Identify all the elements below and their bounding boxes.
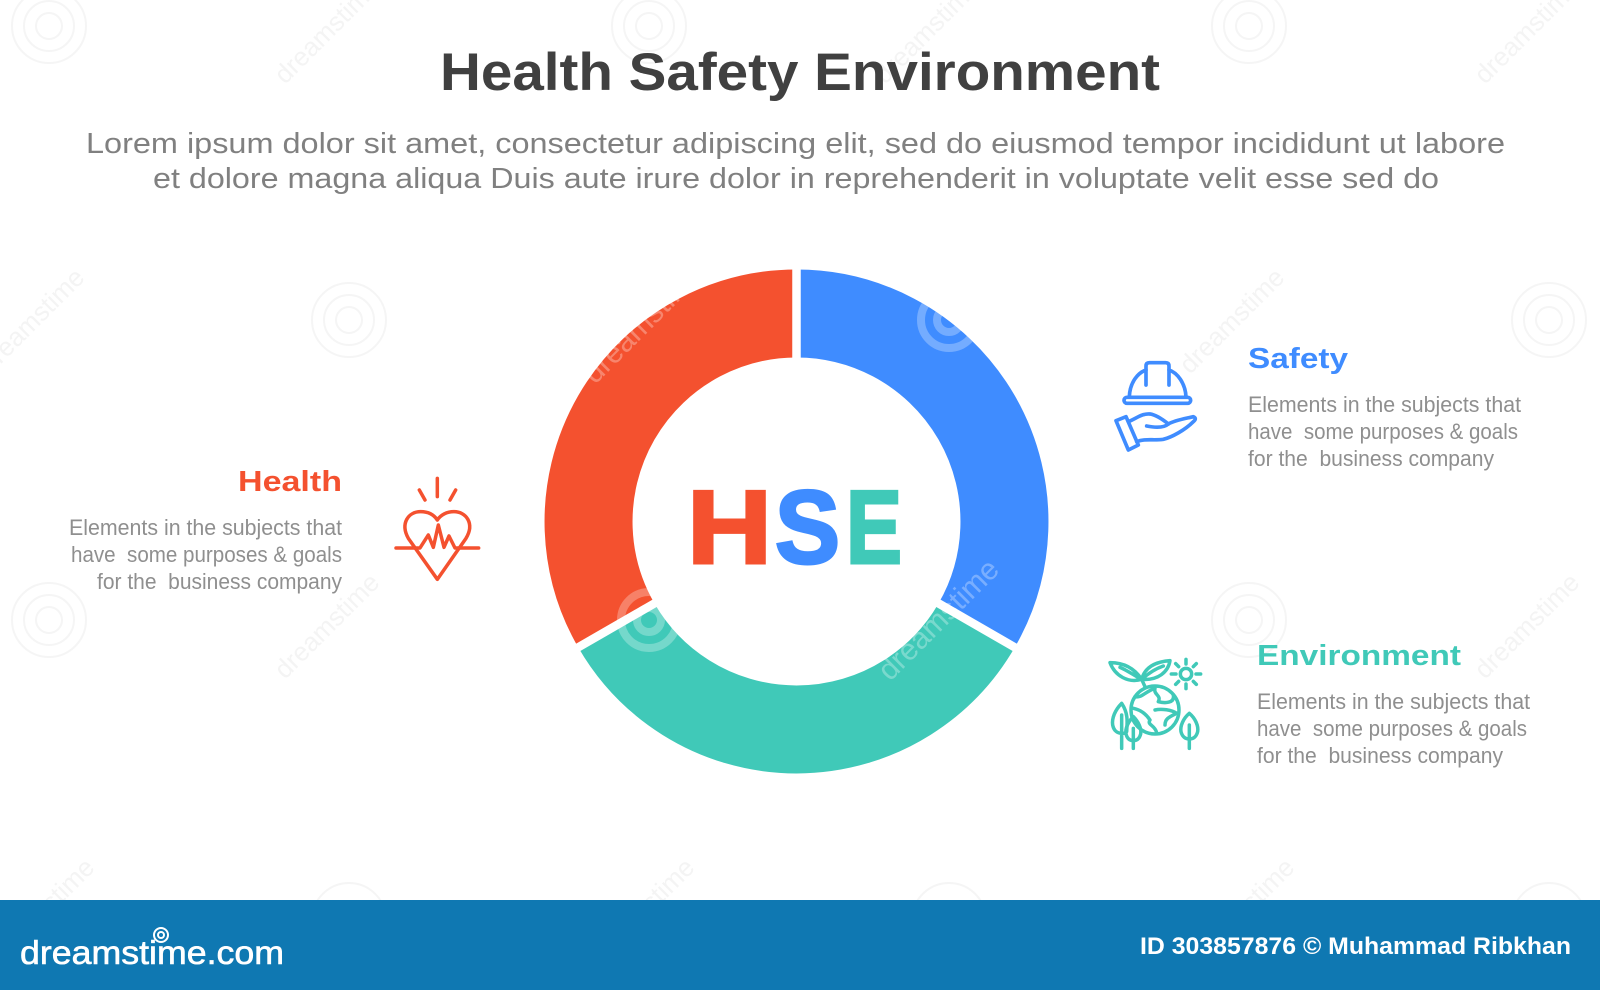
panel: health text — [69, 466, 342, 594]
faint watermark pattern: dreamstime — [1173, 262, 1290, 379]
body: safety: Elements in the subjects that — [1248, 392, 1521, 417]
body: environment: have some purposes & goals — [1257, 716, 1527, 741]
heading: health: Health — [238, 466, 342, 498]
watermark over donut: dreamstime — [577, 256, 711, 390]
panel: environment text — [1257, 640, 1530, 768]
faint watermark pattern: dreamstime — [583, 852, 700, 969]
subtitle text: et dolore magna aliqua Duis aute irure dolor in reprehenderit in voluptate velit esse sed do — [153, 163, 1439, 195]
centre label HSE: S — [775, 470, 840, 586]
centre label HSE: H — [687, 470, 772, 586]
footer logo text: dreamstime.com — [20, 934, 284, 971]
body: health: for the business company — [97, 569, 342, 594]
footer credit: ID 303857876 © Muhammad Ribkhan — [1140, 933, 1571, 960]
donut chart — [558, 256, 1035, 729]
segment gaps — [558, 260, 1035, 659]
body: safety — [1248, 392, 1521, 471]
centre label HSE — [687, 470, 902, 586]
faint watermark pattern: dreamstime — [1183, 852, 1300, 969]
icon: helmet over hand — [1116, 363, 1195, 450]
centre label HSE: E — [846, 470, 902, 586]
body: environment: Elements in the subjects that — [1257, 689, 1530, 714]
body: health: Elements in the subjects that — [69, 515, 342, 540]
body: health: have some purposes & goals — [71, 542, 342, 567]
subtitle text — [86, 128, 1505, 195]
subtitle text: Lorem ipsum dolor sit amet, consectetur adipiscing elit, sed do eiusmod tempor incididunt ut labore — [86, 128, 1505, 160]
segment: health (red) — [589, 314, 796, 626]
faint watermark pattern: dreamstime — [268, 567, 385, 684]
heading: environment: Environment — [1257, 640, 1461, 672]
logo spiral — [154, 928, 168, 942]
watermark over donut — [577, 256, 1006, 687]
body: environment — [1257, 689, 1530, 768]
watermark over donut: dreamstime — [872, 553, 1006, 687]
body: safety: have some purposes & goals — [1248, 419, 1518, 444]
body: safety: for the business company — [1248, 446, 1494, 471]
footer bar — [0, 900, 1600, 990]
icon: earth with plant, sun and trees — [1110, 659, 1201, 748]
panel: safety text — [1248, 343, 1521, 471]
segment: environment (teal) — [616, 626, 977, 729]
body: environment: for the business company — [1257, 743, 1503, 768]
heading: safety: Safety — [1248, 343, 1348, 375]
body: health — [69, 515, 342, 594]
segment: safety (blue) — [796, 314, 1004, 626]
title: Health Safety Environment — [440, 43, 1160, 102]
faint watermark pattern: dreamstime — [1468, 567, 1585, 684]
icon: heart with pulse — [396, 478, 479, 579]
